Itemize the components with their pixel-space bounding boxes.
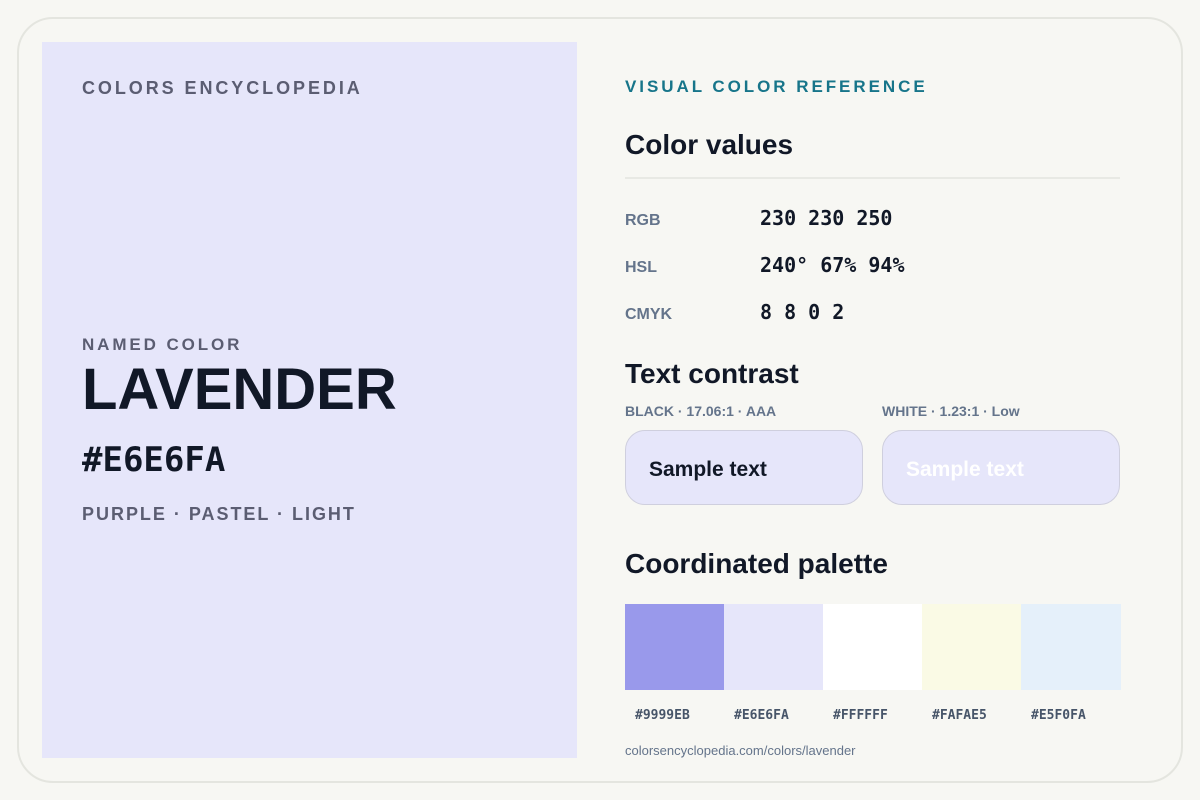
swatch E5F0FA — [1021, 604, 1121, 690]
color tags: PURPLE · PASTEL · LIGHT — [82, 504, 356, 524]
brand label: COLORS ENCYCLOPEDIA — [82, 78, 363, 98]
hex code: #E6E6FA — [82, 440, 225, 480]
HSL value: 240° 67% 94% — [760, 253, 904, 277]
swatch E6E6FA — [724, 604, 823, 690]
HSL label: HSL — [625, 259, 657, 276]
swatch FAFAE5 — [922, 604, 1021, 690]
heading: coordinated palette: Coordinated palette — [625, 548, 888, 579]
CMYK value: 8 8 0 2 — [760, 300, 844, 324]
black sample text: Sample text — [649, 458, 767, 481]
swatch 9999EB — [625, 604, 724, 690]
black sample box — [625, 430, 863, 505]
hex label FFFFFF: #FFFFFF — [833, 708, 888, 723]
white sample box — [882, 430, 1120, 505]
palette swatches — [625, 604, 1121, 690]
color name: LAVENDER — [82, 357, 397, 422]
swatch FFFFFF — [823, 604, 922, 690]
CMYK label: CMYK — [625, 306, 672, 323]
white sample text: Sample text — [906, 458, 1024, 481]
black contrast caption: BLACK · 17.06:1 · AAA — [625, 403, 776, 419]
eyebrow: named color: NAMED COLOR — [82, 335, 242, 354]
hex label FAFAE5: #FAFAE5 — [932, 708, 987, 723]
heading: text contrast: Text contrast — [625, 358, 799, 389]
hex label E5F0FA: #E5F0FA — [1031, 708, 1086, 723]
white contrast caption: WHITE · 1.23:1 · Low — [882, 403, 1020, 419]
hex label 9999EB: #9999EB — [635, 708, 690, 723]
panel: color swatch — [42, 42, 577, 758]
eyebrow: visual color reference: VISUAL COLOR REFERENCE — [625, 77, 928, 96]
hex label E6E6FA: #E6E6FA — [734, 708, 789, 723]
heading: color values: Color values — [625, 129, 793, 160]
source url: colorsencyclopedia.com/colors/lavender — [625, 743, 856, 758]
RGB label: RGB — [625, 212, 661, 229]
RGB value: 230 230 250 — [760, 206, 892, 230]
